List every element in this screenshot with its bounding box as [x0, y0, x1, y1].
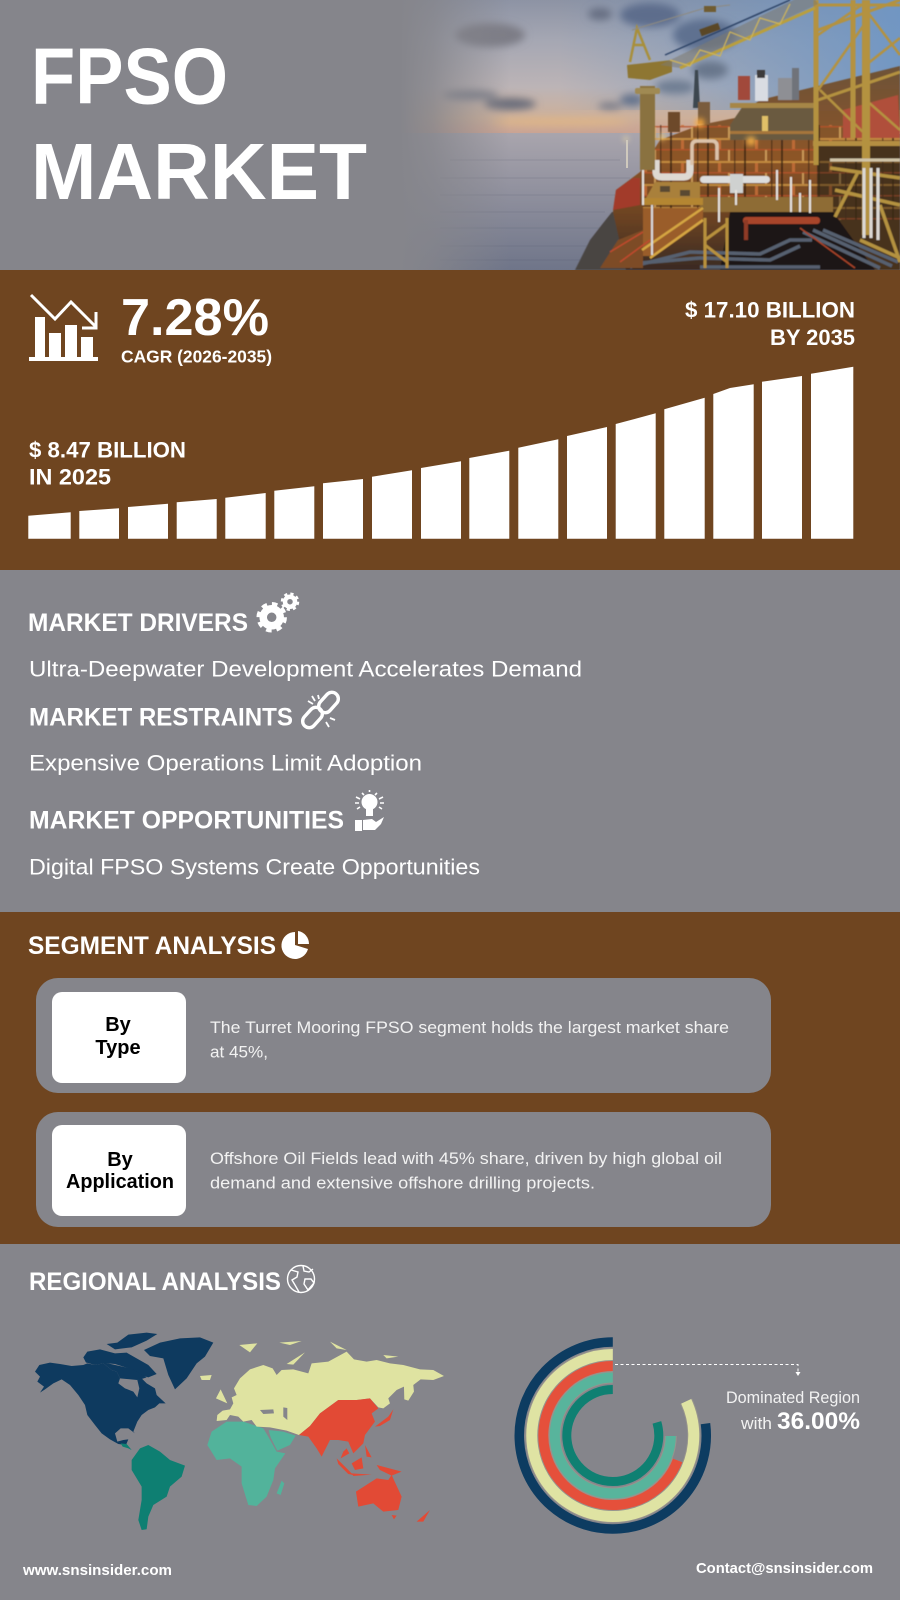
- text: market opportunity: Digital FPSO Systems Create Opportunities: [29, 854, 480, 880]
- lower pipes: [630, 230, 898, 268]
- title: MARKET: [31, 127, 367, 216]
- callout: dominated region share: 36.00%: [777, 1408, 860, 1435]
- footer: www.snsinsider.com: [22, 1562, 172, 1579]
- hull: [574, 212, 626, 270]
- icon: pie chart: [281, 931, 309, 959]
- panel: market size growth: [0, 270, 900, 570]
- icon: light bulb on hand: [355, 790, 384, 831]
- icon: bar chart with trend arrow: [29, 295, 98, 361]
- label box: by type: By: [105, 1014, 132, 1036]
- title: FPSO: [31, 32, 228, 120]
- panel: regional analysis: [29, 1266, 860, 1530]
- label box: by type: [52, 992, 186, 1083]
- value 2025: [29, 438, 186, 490]
- value 2025: IN 2025: [29, 464, 111, 490]
- text: market restraint: Expensive Operations Limit Adoption: [29, 750, 422, 776]
- dark lower bay: [720, 212, 875, 270]
- text: market driver: Ultra-Deepwater Development Accelerates Demand: [29, 656, 582, 682]
- icon: gears: [258, 594, 298, 631]
- main vessel body: [613, 66, 900, 270]
- yellow column frame: [816, 0, 900, 262]
- callout: dominated region share: [726, 1389, 860, 1435]
- value 2035: [685, 298, 855, 350]
- decks: [645, 182, 700, 200]
- chart: concentric regional share arcs: [519, 1342, 706, 1529]
- derrick: [693, 70, 700, 108]
- crane head: [627, 60, 672, 80]
- heading: regional analysis: REGIONAL ANALYSIS: [29, 1268, 281, 1296]
- card: by type: [36, 978, 771, 1093]
- label box: by type: Type: [95, 1037, 141, 1059]
- region: Africa and Middle East: [207, 1422, 296, 1506]
- footer: [22, 1560, 873, 1579]
- label box: by application: By: [107, 1149, 134, 1171]
- crane pedestal: [640, 86, 655, 170]
- value 2025: $ 8.47 BILLION: [29, 438, 186, 462]
- stacks: [755, 75, 768, 101]
- label box: by application: [52, 1125, 186, 1216]
- text: by type description: at 45%,: [210, 1042, 268, 1062]
- stairs and walkway: [600, 230, 643, 268]
- text: by application description: [210, 1149, 722, 1192]
- text: by application description: demand and extensive offshore drilling projects.: [210, 1174, 595, 1192]
- region: Europe and North Asia: [200, 1341, 444, 1435]
- value 2035: $ 17.10 BILLION: [685, 298, 855, 322]
- footer: Contact@snsinsider.com: [696, 1560, 873, 1577]
- header panel: [31, 0, 900, 270]
- text: by type description: [210, 1018, 729, 1062]
- value 2035: BY 2035: [770, 325, 855, 350]
- panel: market dynamics: [0, 570, 900, 912]
- upper superstructure: [730, 103, 815, 140]
- map: world by region: [35, 1333, 444, 1530]
- label box: by application: Application: [66, 1171, 174, 1193]
- CAGR value: 7.28%: [121, 289, 269, 347]
- icon: broken chain link: [300, 690, 341, 730]
- region: Asia Pacific: [299, 1398, 430, 1522]
- region: North America: [35, 1333, 213, 1445]
- heading: market drivers: MARKET DRIVERS: [28, 609, 248, 637]
- callout: dominated region share: Dominated Region: [726, 1389, 860, 1407]
- heading: market opportunities: MARKET OPPORTUNITIES: [29, 806, 344, 834]
- CAGR value: CAGR (2026-2035): [121, 346, 272, 366]
- crane boom: [660, 0, 818, 68]
- callout: dominated region share: with: [740, 1415, 772, 1433]
- region: South America: [121, 1443, 185, 1530]
- text: by application description: Offshore Oil Fields lead with 45% share, driven by high global oil: [210, 1149, 722, 1168]
- heading: market restraints: MARKET RESTRAINTS: [29, 704, 293, 732]
- panel: segment analysis: [0, 912, 900, 1244]
- white process pipes: [656, 160, 690, 177]
- bar chart: growth 2025 to 2035: [28, 367, 853, 539]
- support frame lower: [705, 218, 727, 268]
- card: by application: [36, 1112, 771, 1227]
- red structure: [613, 178, 640, 210]
- heading: segment analysis: SEGMENT ANALYSIS: [28, 932, 276, 960]
- text: by type description: The Turret Mooring FPSO segment holds the largest market share: [210, 1018, 729, 1037]
- right beam zone: [817, 142, 900, 270]
- callout line: dominated region: [615, 1364, 800, 1376]
- title: [31, 32, 367, 216]
- photo: offshore FPSO vessel at sunset: [400, 0, 900, 270]
- icon: globe: [288, 1266, 314, 1292]
